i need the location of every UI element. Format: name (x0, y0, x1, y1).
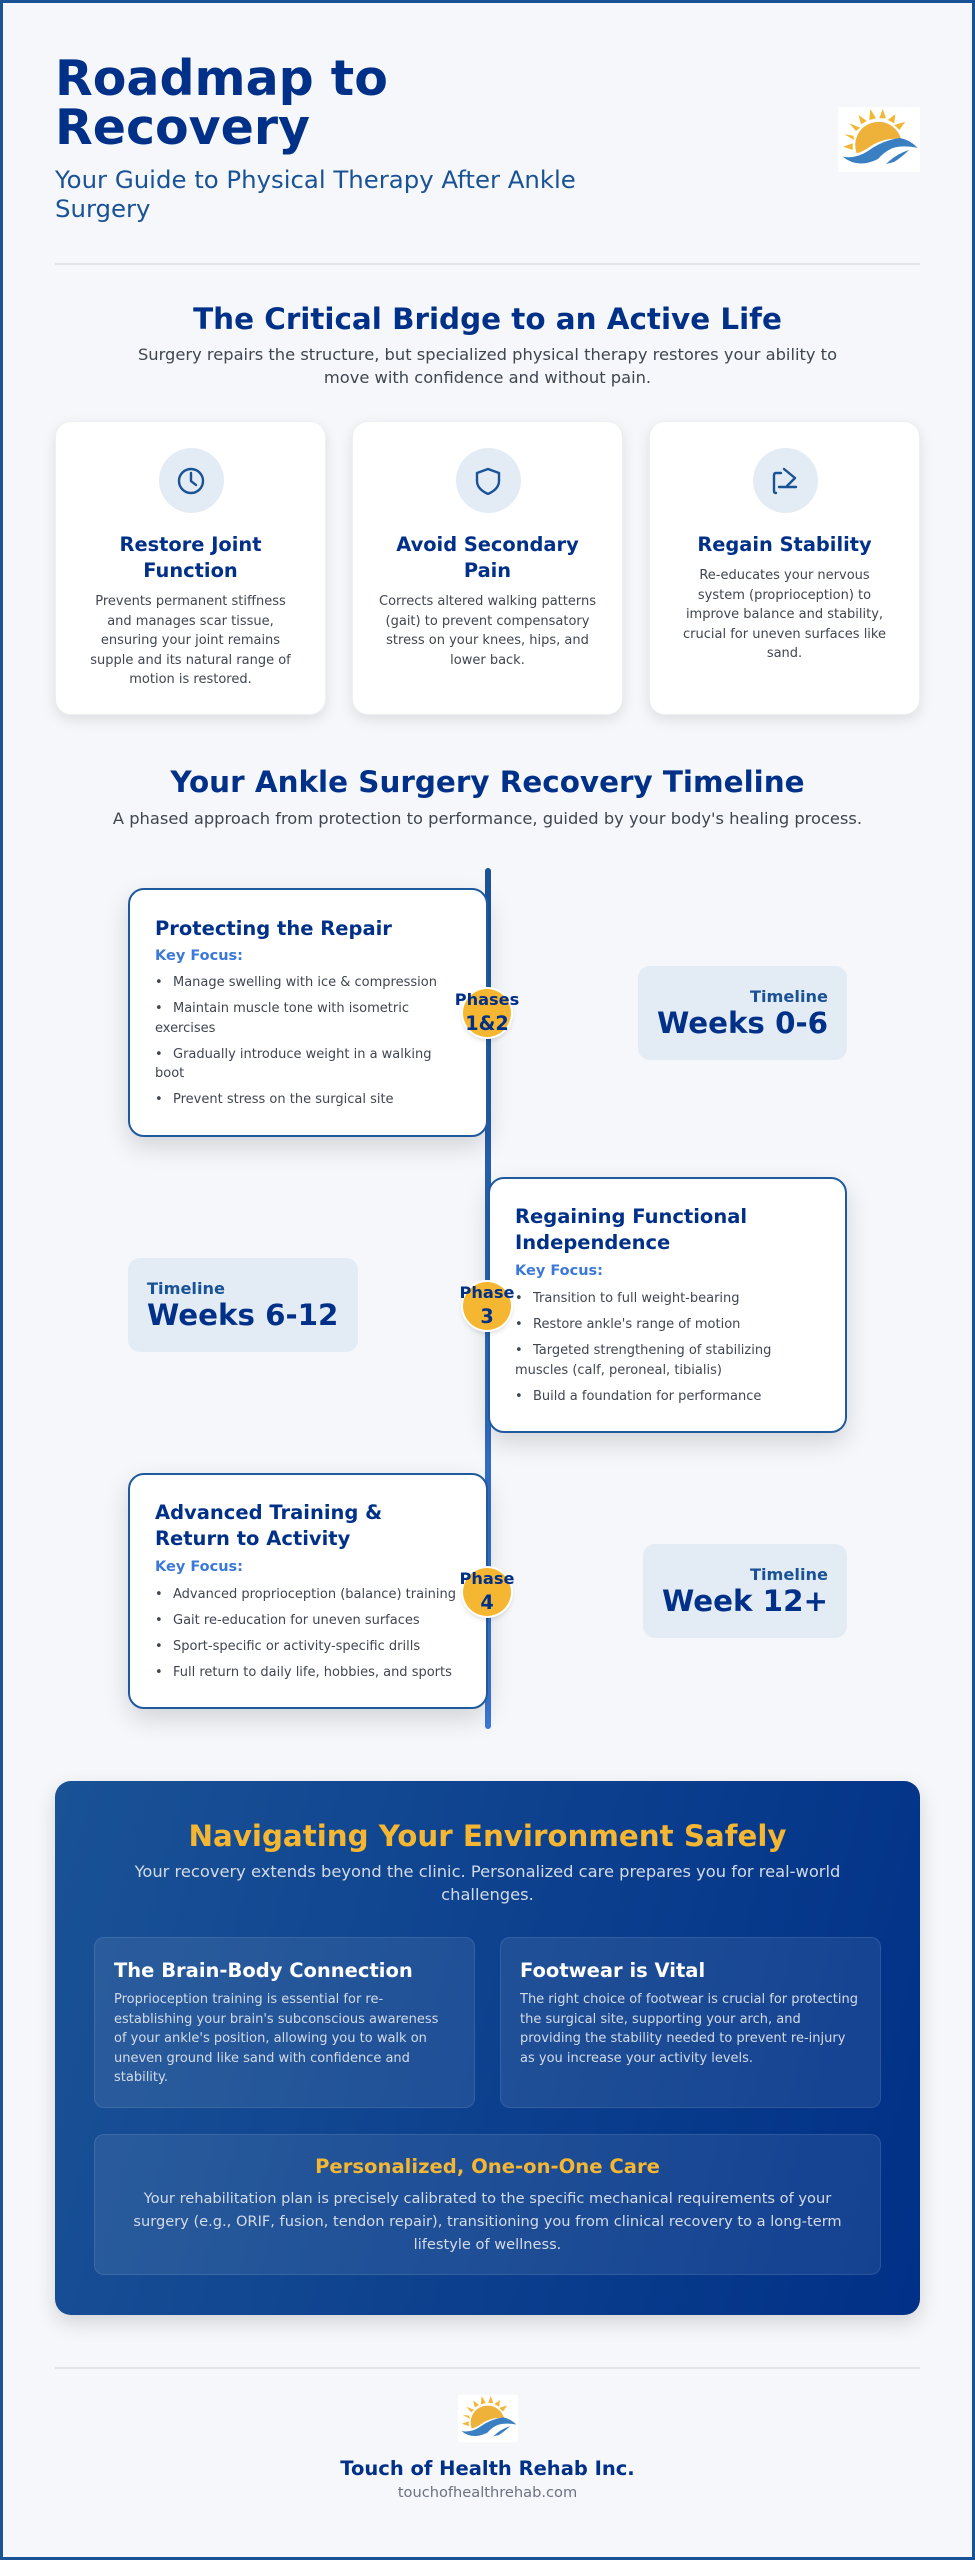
timeline spine (484, 868, 490, 1729)
card text: improve balance and stability, (686, 607, 883, 622)
phase title (515, 1205, 747, 1254)
phase title: Protecting the Repair (155, 917, 392, 940)
phase bullets: • (155, 1613, 163, 1628)
timeline intro: A phased approach from protection to performance, guided by your body's healing process. (113, 809, 862, 828)
icon: shield (456, 448, 520, 513)
node label (460, 1569, 514, 1614)
card title (120, 533, 262, 582)
subtitle (55, 165, 576, 223)
phase bullets (155, 975, 437, 1107)
card text (90, 594, 291, 687)
card text (133, 2190, 842, 2253)
intro text: Surgery repairs the structure, but specialized physical therapy restores your ability to (138, 345, 837, 364)
card text: providing the stability needed to prevent re-injury (520, 2031, 845, 2046)
card text: as you increase your activity levels. (520, 2050, 753, 2066)
label: Timeline (750, 987, 828, 1006)
card text: system (proprioception) to (698, 588, 871, 602)
phase bullets (515, 1291, 771, 1404)
header (55, 50, 920, 223)
card text: Corrects altered walking patterns (379, 594, 596, 609)
card text: stress on your knees, hips, and (386, 633, 589, 648)
phase title: Regaining Functional (515, 1205, 747, 1228)
panel: regain stability (649, 421, 920, 715)
icon: path arrow (752, 448, 818, 513)
intro text (138, 345, 837, 387)
phase bullets: • (155, 1587, 163, 1602)
timeline box: weeks 6-12 (128, 1258, 358, 1352)
phase bullets: • (515, 1343, 523, 1358)
phase bullets: boot (155, 1066, 184, 1081)
phase bullets: Prevent stress on the surgical site (173, 1092, 394, 1107)
label: Timeline (750, 1565, 828, 1584)
node: phase 4 (463, 1568, 511, 1616)
panel intro (134, 1862, 840, 1904)
phase bullets: • (155, 1001, 163, 1016)
key focus label: Key Focus: (155, 948, 243, 964)
card text: motion is restored. (129, 672, 252, 687)
phase bullets (155, 1587, 456, 1680)
card text: stability. (114, 2070, 168, 2085)
panel: avoid secondary pain (352, 421, 623, 715)
title: Roadmap to (55, 50, 388, 107)
phase title: Advanced Training & (155, 1501, 382, 1524)
card: personalized care (94, 2134, 881, 2275)
phase bullets: Build a foundation for performance (533, 1388, 761, 1404)
phase bullets: Gradually introduce weight in a walking (173, 1046, 432, 1062)
footer (340, 2395, 635, 2501)
card text: surgery (e.g., ORIF, fusion, tendon repair), transitioning you from clinical recovery to a long-term (133, 2213, 842, 2230)
card text: The right choice of footwear is crucial for protecting (520, 1992, 858, 2007)
node: phase 3 (463, 1282, 511, 1330)
key focus label: Key Focus: (515, 1263, 603, 1279)
node label: 3 (480, 1305, 494, 1328)
phase card 3 (128, 1473, 488, 1709)
phase bullets: exercises (155, 1020, 215, 1036)
key focus label: Key Focus: (155, 1559, 243, 1575)
phase bullets: Full return to daily life, hobbies, and sports (173, 1665, 452, 1680)
card text: Proprioception training is essential for re- (114, 1992, 383, 2007)
card text: (gait) to prevent compensatory (386, 614, 589, 628)
phase title (155, 1501, 382, 1550)
card title: Avoid Secondary (396, 533, 579, 556)
panel intro: challenges. (441, 1885, 534, 1904)
website: touchofhealthrehab.com (398, 2484, 577, 2501)
heading: critical bridge: The Critical Bridge to an Active Life (193, 302, 782, 336)
card text: crucial for uneven surfaces like (683, 626, 886, 642)
phase bullets: Sport-specific or activity-specific drills (173, 1639, 420, 1654)
phase bullets: Manage swelling with ice & compression (173, 975, 437, 990)
card title (396, 533, 579, 582)
card text (114, 1992, 438, 2085)
phase bullets: • (155, 1665, 163, 1680)
card text (683, 568, 886, 661)
node label (455, 990, 519, 1035)
phase bullets: • (155, 1046, 163, 1062)
node label: Phase (460, 1569, 514, 1588)
card text: sand. (767, 646, 802, 661)
phase bullets: • (155, 975, 163, 990)
phase title: Return to Activity (155, 1527, 350, 1550)
weeks: Weeks 6-12 (147, 1298, 338, 1332)
card title: Personalized, One-on-One Care (315, 2155, 660, 2178)
card title: Restore Joint (120, 533, 261, 556)
phase bullets: • (155, 1639, 163, 1654)
card: footwear is vital (500, 1937, 881, 2108)
label: Timeline (147, 1279, 225, 1298)
timeline box: week 12+ (643, 1544, 847, 1638)
card text: lower back. (450, 652, 525, 668)
subtitle: Your Guide to Physical Therapy After Ankle (55, 165, 576, 194)
card text: establishing your brain's subconscious awareness (114, 2012, 438, 2026)
card text: of your ankle's position, allowing you to walk on (114, 2031, 427, 2046)
card title: Pain (464, 559, 511, 582)
title (55, 50, 388, 156)
phase bullets: Maintain muscle tone with isometric (173, 1001, 409, 1016)
node label: 1&2 (465, 1012, 509, 1035)
card text: and manages scar tissue, (107, 614, 274, 628)
phase bullets: Gait re-education for uneven surfaces (173, 1613, 420, 1628)
card title: Regain Stability (697, 533, 872, 556)
company name: Touch of Health Rehab Inc. (340, 2457, 635, 2480)
card text: lifestyle of wellness. (414, 2236, 561, 2253)
card text (379, 594, 596, 668)
footer logo (458, 2395, 518, 2442)
timeline box: weeks 0-6 (638, 966, 847, 1060)
phase title: Independence (515, 1231, 670, 1254)
node label: Phase (460, 1283, 514, 1302)
card text: uneven ground like sand with confidence and (114, 2050, 410, 2066)
title: Recovery (55, 99, 310, 156)
node label: Phases (455, 990, 519, 1009)
card text: Re-educates your nervous (699, 568, 870, 583)
card title: Function (143, 559, 238, 582)
card text: Your rehabilitation plan is precisely calibrated to the specific mechanical requirements of your (144, 2190, 831, 2207)
heading: timeline: Your Ankle Surgery Recovery Timeline (170, 765, 805, 799)
intro text: move with confidence and without pain. (324, 368, 651, 387)
icon: clock (158, 448, 224, 513)
card text: ensuring your joint remains (101, 633, 280, 648)
card text: Prevents permanent stiffness (95, 594, 286, 609)
node label: 4 (480, 1591, 494, 1614)
phase card 2 (488, 1177, 847, 1433)
phase bullets: Transition to full weight-bearing (533, 1291, 740, 1306)
panel: restore joint function (55, 421, 326, 715)
panel intro: Your recovery extends beyond the clinic. Personalized care prepares you for real-world (135, 1862, 840, 1881)
phase bullets: muscles (calf, peroneal, tibialis) (515, 1362, 722, 1378)
phase bullets: Advanced proprioception (balance) training (173, 1587, 456, 1602)
subtitle: Surgery (55, 194, 150, 223)
card title: The Brain-Body Connection (114, 1959, 413, 1982)
phase card 1 (128, 888, 488, 1137)
phase bullets: • (515, 1291, 523, 1306)
logo (838, 107, 920, 172)
phase bullets: • (515, 1388, 523, 1404)
phase bullets: Restore ankle's range of motion (533, 1317, 740, 1332)
phase bullets: • (155, 1092, 163, 1107)
weeks: Weeks 0-6 (657, 1006, 828, 1040)
node label (460, 1283, 514, 1328)
panel: navigating your environment (55, 1781, 920, 2315)
card text (520, 1992, 858, 2066)
node: phases 1&2 (463, 989, 511, 1037)
phase bullets: • (515, 1317, 523, 1332)
card text: supple and its natural range of (90, 652, 291, 668)
weeks: Week 12+ (662, 1584, 828, 1618)
phase bullets: Targeted strengthening of stabilizing (533, 1343, 771, 1358)
card: brain-body connection (94, 1937, 475, 2108)
card title: Footwear is Vital (520, 1959, 705, 1982)
card text: the surgical site, supporting your arch, and (520, 2012, 801, 2026)
panel heading: Navigating Your Environment Safely (189, 1819, 786, 1853)
